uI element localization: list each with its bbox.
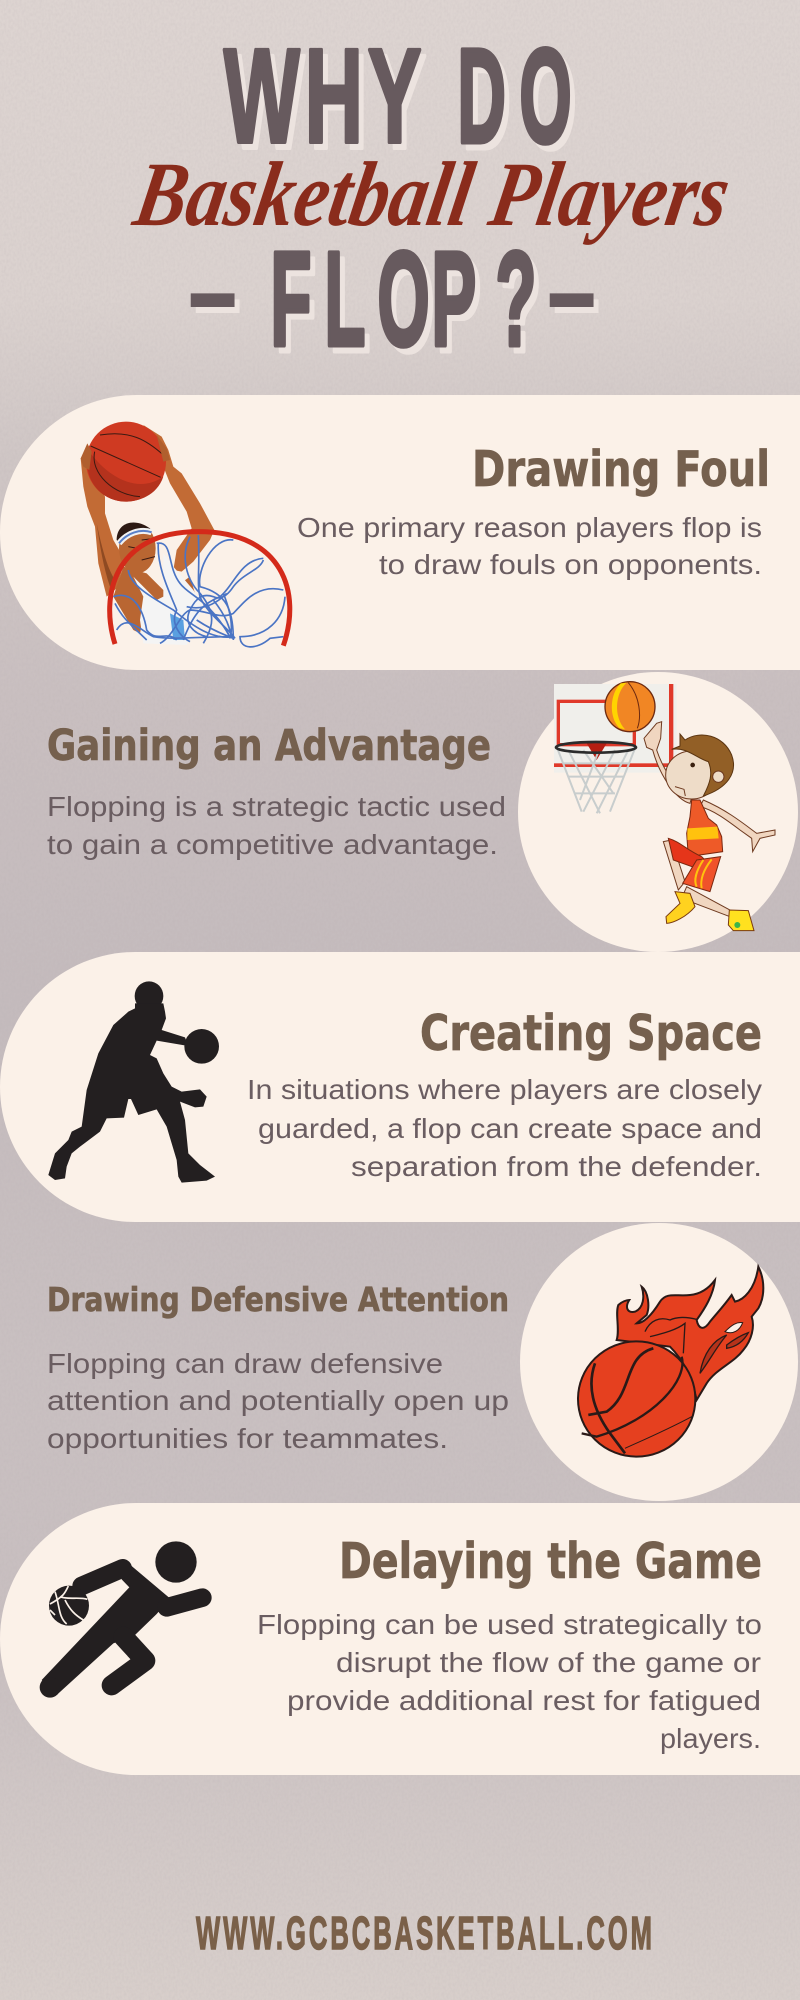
icon: running player with ball [40,1541,202,1698]
title [126,22,737,374]
title line: why do [224,22,572,171]
text: drawing defensive attention body [47,1348,509,1454]
icon: dribbling silhouette [48,981,219,1183]
text: drawing foul body [297,512,762,580]
panel: drawing foul [0,395,800,670]
panel: creating space [0,952,800,1222]
title line: flop [184,225,600,374]
text: drawing defensive attention body: attention and potentially open up [47,1385,509,1416]
text: gaining an advantage body: Flopping is a strategic tactic used [47,791,506,822]
text: drawing foul body: One primary reason players flop is [297,512,762,543]
text: gaining an advantage body: to gain a competitive advantage. [47,829,498,860]
icon: boy shooting at hoop [554,682,775,931]
icon: flaming basketball [578,1267,763,1457]
text: creating space body: In situations where players are closely [247,1074,762,1105]
text: drawing defensive attention body: opportunities for teammates. [47,1423,448,1454]
text: gaining an advantage body [47,791,506,860]
text: drawing foul body: to draw fouls on opponents. [379,549,762,580]
title line: why do: WHY [224,22,421,171]
text: delaying the game body: Flopping can be used strategically to [257,1609,762,1640]
text: delaying the game body: players. [660,1723,761,1754]
text: delaying the game body: provide additional rest for fatigued [287,1685,761,1716]
panel: drawing defensive attention [47,1223,798,1501]
title line: why do: DO [458,22,572,171]
text: creating space body [247,1074,762,1182]
text: creating space body: separation from the defender. [351,1151,762,1182]
heading: drawing defensive attention: Drawing Defensive Attention [47,1280,509,1319]
title line: flop: - [543,226,600,355]
title line: flop: FLOP? [270,225,536,374]
text: delaying the game body: disrupt the flow of the game or [336,1647,761,1678]
footer: website: WWW.GCBCBASKETBALL.COM [196,1907,652,1959]
panel: gaining an advantage [47,672,798,952]
icon: player dunking through hoop [81,422,290,647]
text: delaying the game body [257,1609,762,1754]
text: drawing defensive attention body: Flopping can draw defensive [47,1348,443,1379]
title line: flop: - [184,226,241,355]
heading: gaining an advantage: Gaining an Advantage [47,721,491,771]
text: creating space body: guarded, a flop can create space and [258,1113,762,1144]
panel: delaying the game [0,1503,800,1775]
